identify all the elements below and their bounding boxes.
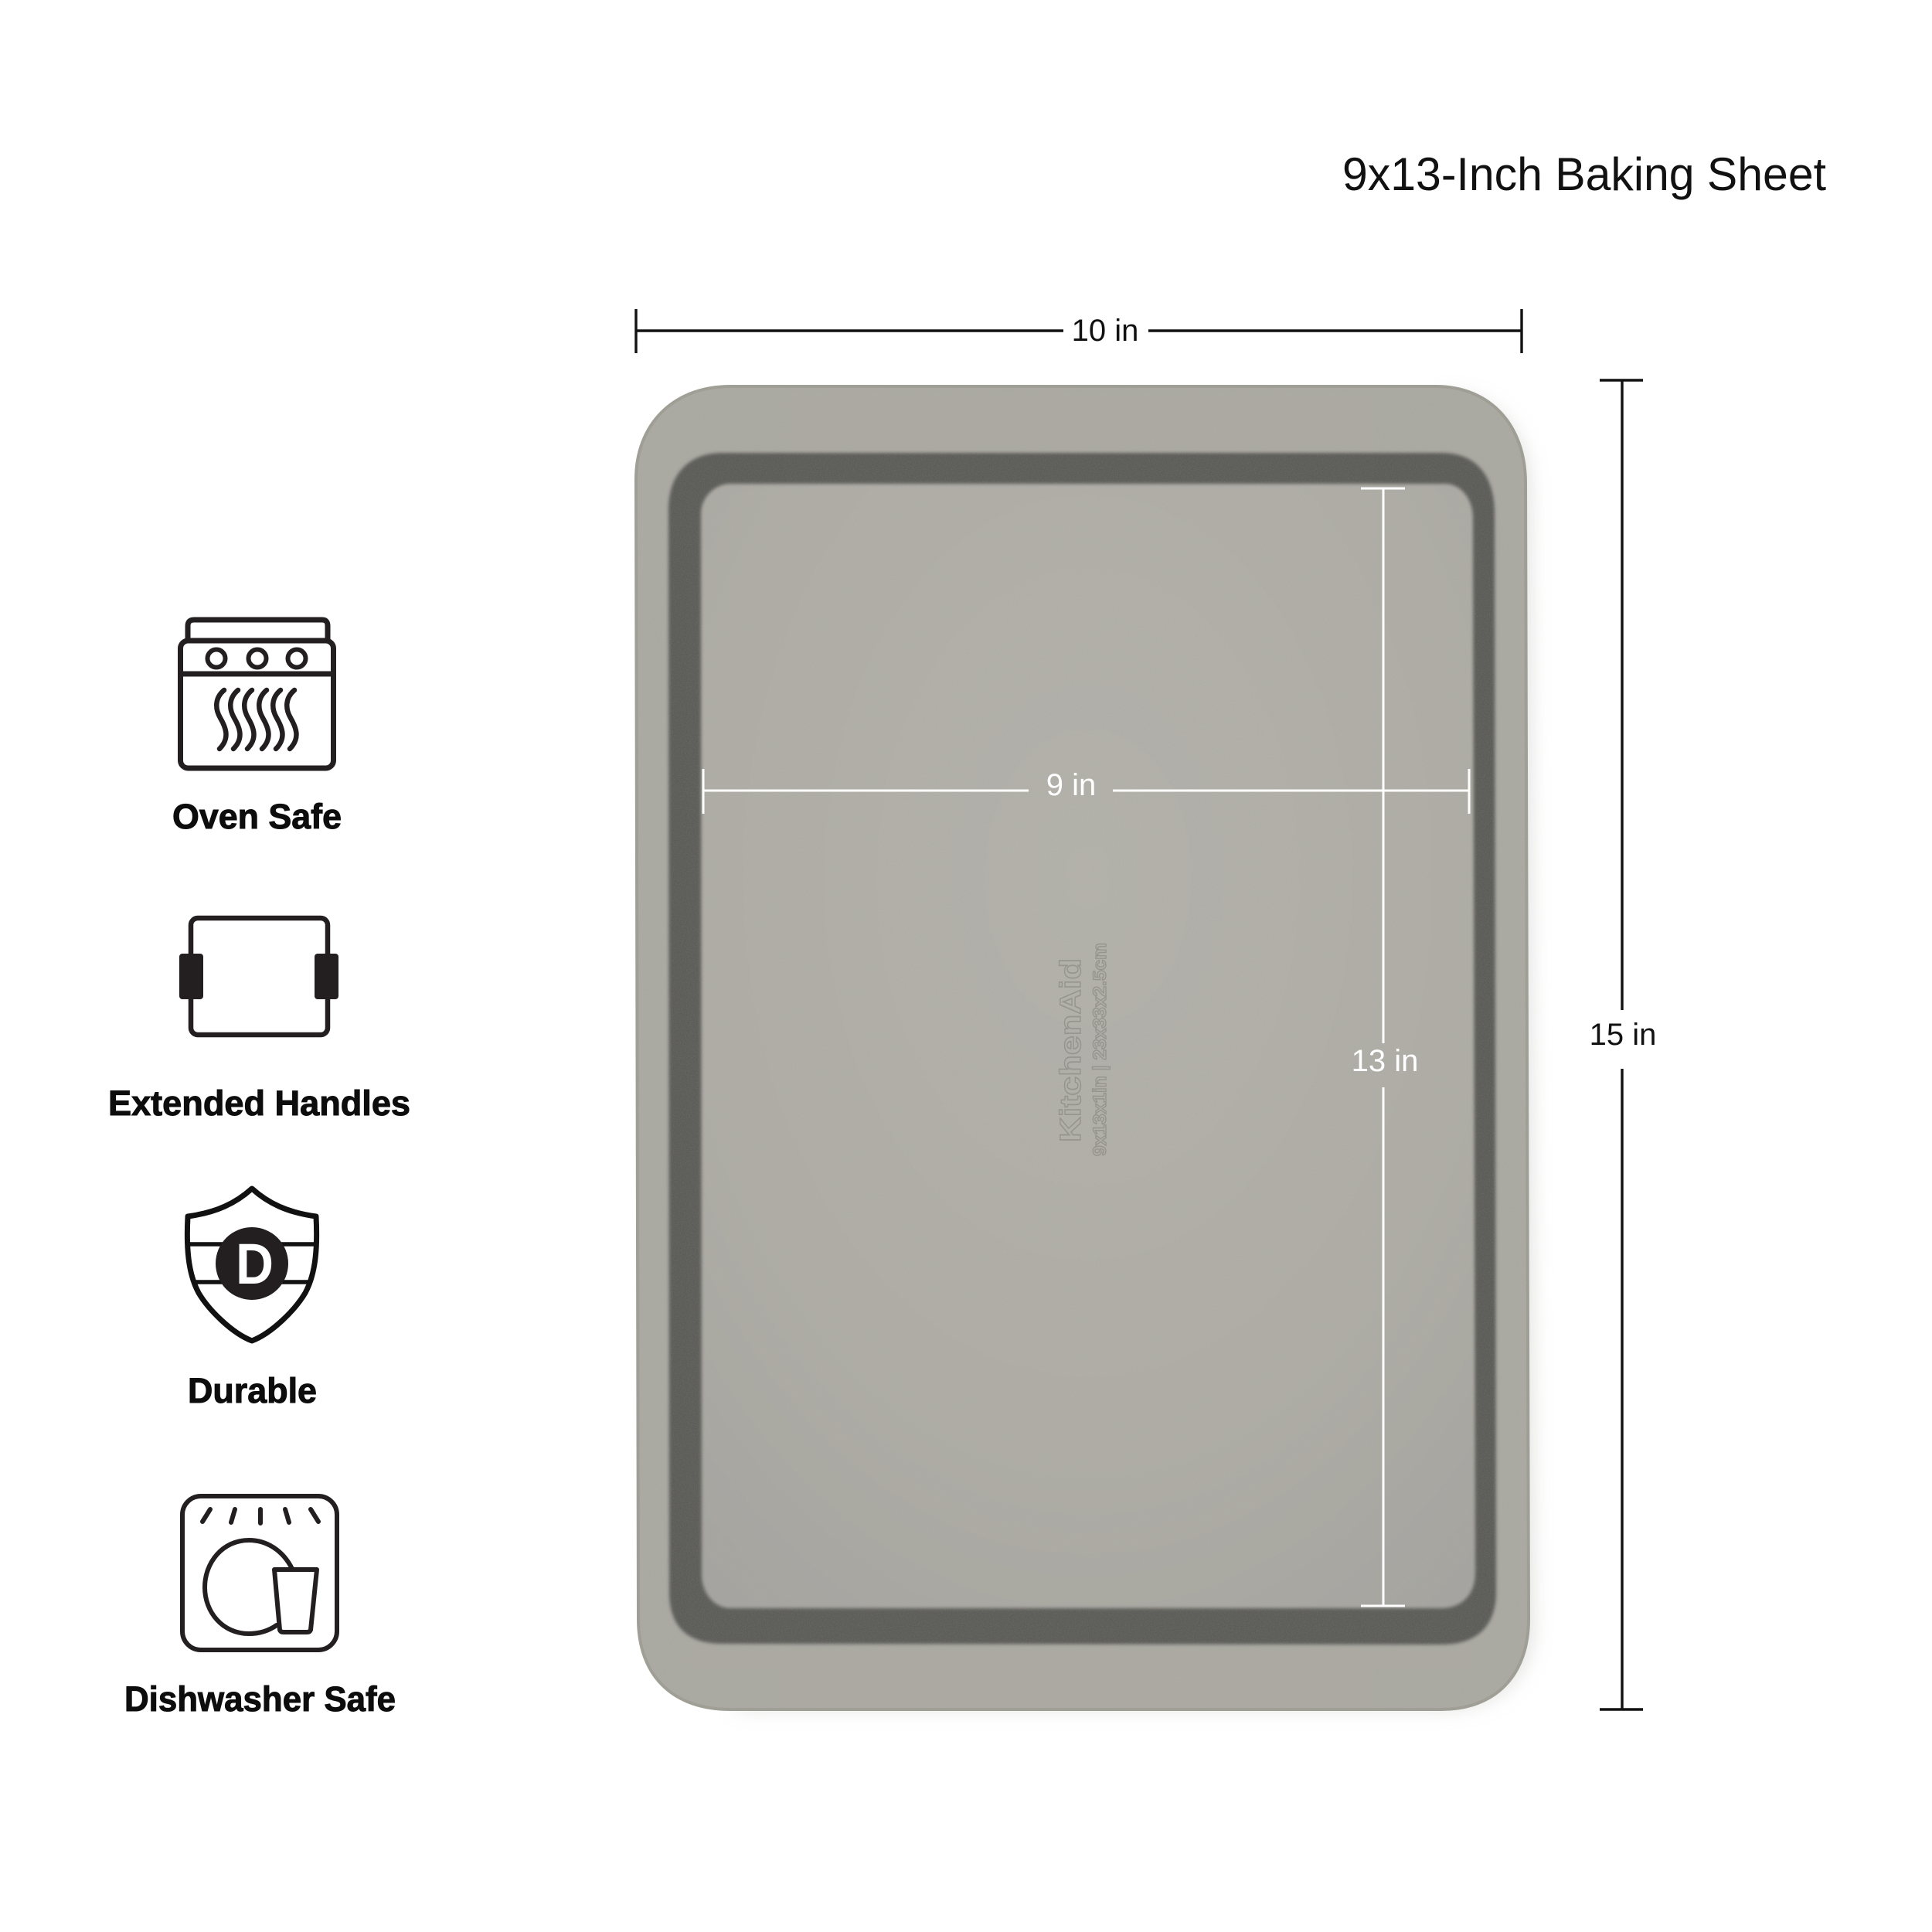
pan surface grain (670, 454, 1495, 1643)
label: extended handles: Extended Handles (108, 1083, 410, 1123)
dimension: 15 in (1590, 380, 1656, 1709)
pan outer rim (636, 386, 1529, 1709)
label: durable: Durable (188, 1371, 317, 1410)
pan dark wall (668, 453, 1496, 1645)
icon: dishwasher safe (182, 1496, 337, 1650)
icon: extended handles (179, 918, 338, 1035)
dimension: 13 in: 13 in (1352, 1044, 1418, 1078)
label: oven safe: Oven Safe (172, 797, 342, 836)
dimension: 10 in (636, 309, 1522, 353)
label: dishwasher safe: Dishwasher Safe (124, 1679, 396, 1719)
title: 9x13-Inch Baking Sheet (1342, 148, 1826, 200)
dimension: 9 in: 9 in (1046, 768, 1096, 802)
icon: durable shield (187, 1189, 317, 1341)
pan floor (701, 484, 1475, 1608)
embossed KitchenAid: KitchenAid (1055, 958, 1087, 1142)
icon: durable shield: D (236, 1232, 274, 1296)
baking sheet (634, 383, 1538, 1716)
dimension: 9 in (703, 768, 1469, 814)
icon: oven safe (181, 620, 334, 768)
embossed size: 9x13x1in | 23x33x2.5cm (1090, 943, 1111, 1156)
dimension: 15 in: 15 in (1590, 1018, 1656, 1052)
embossed brand (1055, 943, 1111, 1156)
dimension: 13 in (1352, 488, 1418, 1606)
dimension: 10 in: 10 in (1072, 314, 1138, 348)
